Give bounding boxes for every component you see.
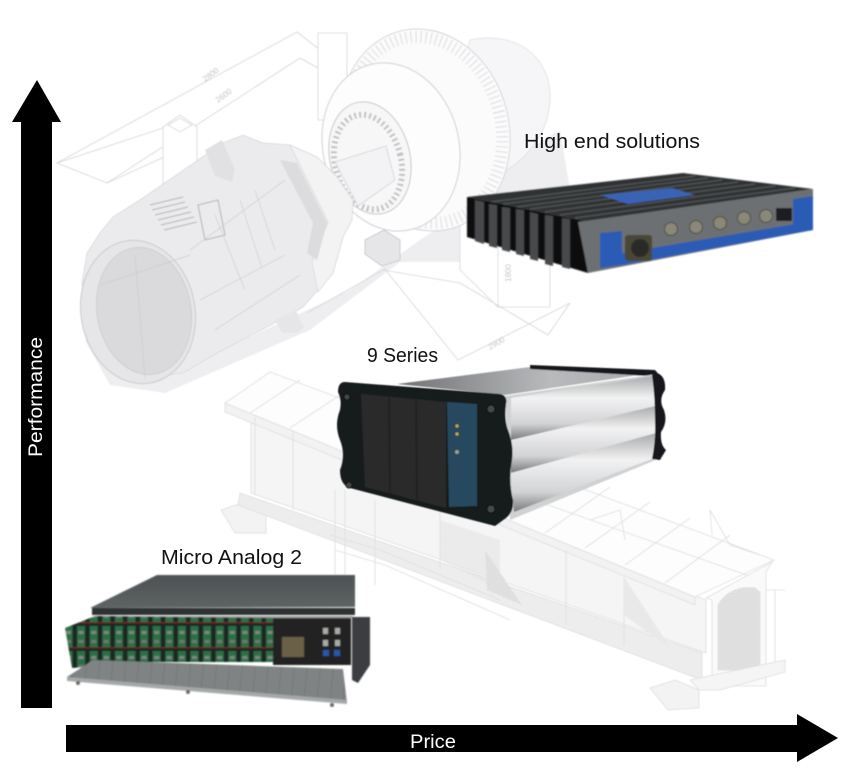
motor foot: [275, 310, 304, 333]
front tray: [67, 660, 347, 703]
panel screws: [344, 394, 495, 513]
motor top bracket: [205, 140, 235, 182]
silver ribs: [511, 375, 660, 440]
background drawing: steel beam: [221, 372, 785, 710]
background drawing: turbine assembly: [57, 11, 570, 393]
dimension lines: [57, 32, 570, 360]
dimension values: 2800: [201, 66, 221, 84]
front panel: [578, 189, 813, 273]
control board: [273, 618, 351, 665]
beam deck: [225, 372, 774, 597]
rack front frame: [92, 608, 355, 615]
product: high end solutions device: [467, 173, 813, 273]
beam feet: [221, 500, 266, 533]
radial fin ring: [319, 11, 531, 249]
side fins: [467, 197, 590, 273]
product: 9 series enclosure: [337, 365, 666, 526]
flange band: [280, 160, 327, 260]
winding coil: [150, 197, 225, 240]
slot panel: [361, 394, 446, 508]
top label: [600, 188, 695, 204]
axis arrow: price: [66, 714, 838, 762]
bottom flange: [238, 493, 702, 680]
finned top: [467, 173, 813, 222]
blue strip: [622, 221, 813, 265]
rear dome: [450, 38, 550, 180]
label: high end solutions: High end solutions: [524, 131, 700, 153]
motor lens: [69, 231, 207, 393]
main disc: [304, 48, 478, 246]
label: 9 series: 9 Series: [367, 345, 438, 367]
axis label: price: Price: [410, 732, 456, 753]
ethernet port: [776, 208, 792, 221]
body panel lines: [190, 180, 300, 330]
turbine ground shadow: [85, 130, 570, 393]
hub: [317, 93, 423, 223]
axis arrow: performance: [12, 80, 61, 708]
product: micro analog 2 rack: [65, 575, 370, 707]
flange ring: [290, 145, 353, 292]
coaxial connectors: [664, 210, 772, 236]
rack lid: [90, 575, 355, 608]
card slots: [65, 616, 273, 668]
dimension values: [201, 66, 513, 352]
dimension values: 2900: [486, 335, 507, 352]
dimension values: 1800: [504, 264, 513, 282]
beam end section: [706, 562, 772, 686]
axis label: performance: Performance: [26, 337, 47, 457]
dimension values: 2600: [214, 87, 234, 105]
beam web: [251, 417, 706, 653]
front face plate: [337, 382, 513, 526]
tray feet: [76, 681, 334, 707]
hatched web plates: [485, 550, 522, 605]
extruded silver side: [505, 374, 665, 520]
rack mounting ear: [352, 617, 370, 683]
cooler box: [365, 230, 400, 266]
blue status panel: [447, 402, 477, 507]
motor body: [82, 135, 353, 377]
deck cells: [250, 380, 785, 665]
circular power connector: [625, 235, 652, 261]
label: micro analog 2: Micro Analog 2: [161, 547, 302, 569]
enclosure top: [397, 367, 652, 395]
rear edge: [652, 373, 666, 460]
shaft: [335, 146, 395, 206]
status LEDs: [455, 424, 459, 454]
